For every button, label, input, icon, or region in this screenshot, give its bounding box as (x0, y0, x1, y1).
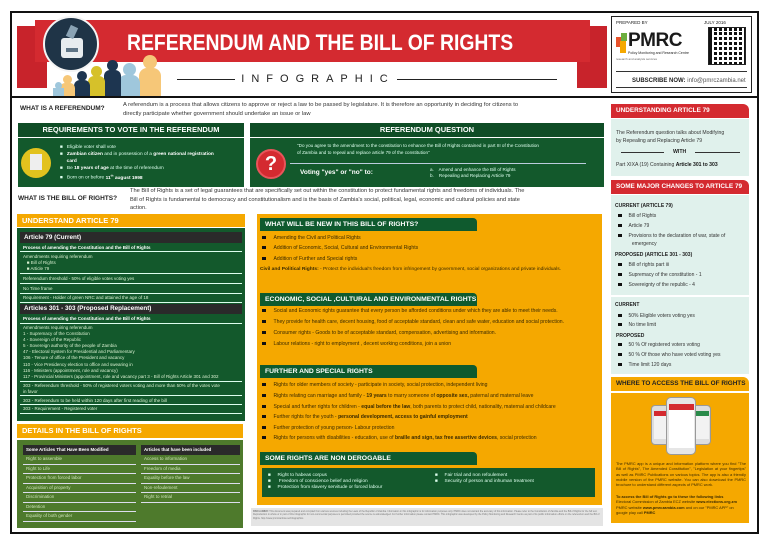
panel: understand article 79: UNDERSTAND ARTICLE 79 (22, 216, 119, 225)
panel: requirements: ■ Zambian citizen and in possession of a green national registration (60, 152, 214, 157)
heading: what will be new: WHAT WILL BE NEW IN THIS BILL OF RIGHTS? (265, 221, 418, 228)
table: modified articles: Equality of both gender (26, 513, 72, 518)
logo: research and analysis services (616, 57, 657, 61)
table: modified articles: Right to Life (26, 466, 50, 470)
panel: requirements: REQUIREMENTS TO VOTE IN THE REFERENDUM (43, 125, 219, 134)
non derogable list: ■ Protection from slavery servitude or forced labour (268, 485, 382, 490)
panel: understanding article 79: The Referendum question talks about Modifying (616, 130, 724, 136)
header divider (12, 96, 758, 98)
text: CURRENT (ARTICLE 79) (615, 203, 673, 209)
text: Article 79 (628, 223, 649, 229)
panel: major changes (611, 180, 749, 374)
non derogable list (262, 468, 595, 497)
text: 110 - Vice Presidency election to office and swearing in (23, 362, 133, 367)
text: Rights for persons with disabilities - education, use of braille and sign, tax free assertive devices, social protection (274, 435, 537, 441)
logo (616, 30, 689, 61)
non derogable list: ■ Fair trial and non refoulement (435, 473, 507, 478)
text: 116 - Ministers (appointment, role and vacancy) (23, 368, 118, 373)
text: Bill of Rights (628, 213, 656, 219)
text: Process of amending the Constitution and the Bill of Rights (23, 245, 151, 250)
text: PROPOSED (ARTICLE 301 - 303) (615, 252, 692, 258)
panel: requirements: ■ Born on or before 11th august 1998 (60, 173, 143, 181)
text: in favor (23, 389, 38, 394)
panel: details in the bill of rights (17, 424, 243, 528)
text: Addition of Economic, Social, Cultural and Environmental Rights (274, 245, 418, 251)
text: 106 - Tenure of office of the President and vacancy (23, 355, 124, 360)
icon: question mark (256, 149, 286, 179)
what is the bill of rights: The Bill of Rights is a set of legal guarantees that are specifically set out within the constitution to protect fundamental rights and freedoms of individuals. The (130, 188, 524, 194)
panel: understand article 79 (17, 214, 245, 421)
subscribe: SUBSCRIBE NOW: info@pmrczambia.net (632, 78, 746, 84)
icon: ballot box circle (43, 16, 99, 72)
icon: question mark: ? (265, 153, 277, 175)
table: modified articles: Protection from forced labor (26, 475, 82, 480)
text: 117 - Provincial Ministers (appointment, role and vacancy part 3 - Bill of Rights Article 301 and 302 (23, 374, 219, 379)
non derogable list: ■ Freedom of conscience belief and religion (268, 479, 368, 484)
table: modified articles: Right to assemble (26, 456, 62, 461)
disclaimer: DISCLAIMER: This document was prepared and compiled from various sources including the Laws of the Republic of Zambia. Information in this infographic is for information purposes only. PMRC does not warrant the accuracy of this information. Please refer to the Constitution of Zambia and the Bill of Rights for the full text. Reproduction in whole or in part of this infographic for non-commercial purposes is permitted provided the source is acknowledged. For further information please contact PMRC. This infographic was developed by the Policy Monitoring and Research Centre as part of its public information efforts on the referendum and the Bill of Rights. http://www.pmrczambia.net/infographics (253, 510, 599, 520)
heading: economic social rights (260, 293, 477, 306)
table: included articles: Freedom of media (144, 466, 181, 470)
text: 50% Eligible voters voting yes (628, 313, 695, 319)
panel: requirements (18, 123, 244, 187)
text: PROPOSED (616, 333, 644, 339)
text: 303 - Requirement - Registered voter (23, 406, 97, 411)
header banner (17, 20, 607, 88)
logo: Policy Monitoring and Research Centre (628, 51, 689, 55)
ribbon right tail (577, 26, 607, 88)
text: 4 - Sovereign of the Republic (23, 337, 81, 342)
infographic subtitle: INFOGRAPHIC (241, 73, 395, 85)
logo: PMRC (628, 30, 682, 51)
text: 47 - Electoral System for Presidential and Parliamentary (23, 349, 135, 354)
disclaimer (251, 508, 603, 526)
heading: further and special rights (260, 365, 477, 378)
table: included articles: Access to information (144, 456, 187, 461)
panel: understanding article 79 (611, 104, 749, 176)
text: Special and further rights for children - equal before the law, both parents to protect child, nationality, maternal and childcare (274, 404, 556, 410)
text: 1 - Supremacy of the Constitution (23, 331, 90, 336)
panel: referendum question: "Do you agree to the amendment to the constitution to enhance the Bill of Rights contained in part III of the Constitution (297, 143, 539, 148)
ribbon left tail (17, 26, 47, 88)
text: CURRENT (615, 302, 639, 308)
text: No time limit (628, 322, 656, 328)
text: Sovereignty of the republic - 4 (628, 282, 695, 288)
what is a referendum (20, 102, 518, 117)
text: No Time frame (23, 286, 53, 291)
what is the bill of rights: WHAT IS THE BILL OF RIGHTS? (18, 195, 117, 202)
table: modified articles (23, 445, 136, 522)
panel: referendum question: of Zambia and to repeal and replace article 79 of the constitution" (297, 150, 430, 155)
heading: what will be new (260, 218, 477, 231)
panel: referendum question: a. Amend and enhance the Bill of Rights (430, 167, 516, 172)
text: Amending the Civil and Political Rights (274, 235, 361, 241)
icon: QR code (708, 27, 746, 65)
panel: details in the bill of rights: DETAILS IN THE BILL OF RIGHTS (22, 426, 142, 435)
text: Time limit 120 days (628, 362, 671, 368)
text: Further protection of young person- Labour protection (274, 425, 394, 431)
PMRC box: JULY 2016 (704, 20, 726, 25)
panel: where to access: The PMRC app is a unique and information platform where you find "The Bill of Rights", The Amended Constitution", "Legislation at your fingertips" as well as PMRC Publications on various topics. The app is also a friendly mobile version of the PMRC website. You can also download the PMRC brochure to understand different aspects of PMRC work. (616, 461, 746, 487)
text: Article 79 (Current) (24, 234, 81, 241)
text: Labour relations - right to employment , decent working conditions, join a union (274, 341, 451, 347)
panel: referendum question: Voting "yes" or "no" to: (300, 169, 373, 176)
text: ■ Article 79 (27, 266, 49, 271)
text: Articles 301 - 303 (Proposed Replacement) (24, 305, 151, 312)
text: Addition of Further and Special rights (274, 256, 357, 262)
what is the bill of rights (18, 188, 524, 211)
text: 303 - Referendum to be held within 120 days after first reading of the bill (23, 398, 167, 403)
panel: where to access: WHERE TO ACCESS THE BILL OF RIGHTS (616, 380, 745, 387)
text: Rights for older members of society - participate in society, social protection, independent living (274, 382, 487, 388)
text: Further rights for the youth - personal development, access to gainful employment (274, 414, 468, 420)
table: included articles: Equality before the law (144, 475, 190, 480)
what is a referendum: A referendum is a process that allows citizens to approve or reject a law to be passed by legislature. It is therefore an opportunity in deciding for citizens to (123, 102, 518, 108)
table: modified articles: Some Articles That Have Been Modified (26, 447, 109, 452)
panel: new rights (orange) (257, 214, 602, 505)
text: ■ Bill of Rights (27, 260, 56, 265)
heading: further and special rights: FURTHER AND SPECIAL RIGHTS (265, 368, 373, 375)
text: Civil and Political Rights: - Protect the individual's freedom from infringement by government, social organizations and private individuals. (260, 267, 561, 272)
PMRC box: PREPARED BY (616, 20, 648, 25)
what is the bill of rights: Bill of Rights is fundamental to democracy and constitutionalism and is the basis of Zambia's social, political, legal, economic and cultural policies and state (130, 196, 520, 202)
table: included articles: Non-refoulement (144, 484, 178, 490)
panel: understanding article 79: Part XIXA (19) Containing Article 301 to 303 (616, 162, 718, 168)
text: 303 - Referendum threshold - 50% of registered voters voting and more than 50% of the votes vote (23, 383, 220, 388)
panel: requirements: ■ Be 18 years of age at the time of referendum (60, 166, 164, 171)
what is a referendum: WHAT IS A REFERENDUM? (20, 105, 105, 112)
text: They provide for health care, decent housing, food of acceptable standard, clean and safe water, education and social protection. (274, 319, 564, 325)
icon: document (21, 148, 51, 178)
panel: understanding article 79: by Repealing and Replacing Article 79 (616, 138, 702, 144)
table: modified articles: Detention (26, 504, 45, 508)
icon: phones (651, 397, 711, 455)
heading: non derogable: SOME RIGHTS ARE NON DEROGABLE (265, 455, 391, 462)
table: modified articles: Discrimination (26, 494, 54, 499)
heading: non derogable (260, 452, 477, 465)
panel: referendum question (250, 123, 604, 187)
panel: referendum question: b. Repealing and Replacing Article 79 (430, 173, 510, 178)
panel: where to access (611, 377, 749, 523)
PMRC box (611, 16, 752, 93)
text: 5 - Sovereign authority of the people of Zambia (23, 343, 117, 348)
panel: referendum question: REFERENDUM QUESTION (380, 125, 474, 134)
icon: people crowd (53, 55, 161, 96)
table: modified articles: Acquisition of property (26, 484, 71, 490)
panel: requirements: card (67, 159, 77, 164)
text: Provisions to the declaration of war, state of (628, 233, 725, 239)
text: Supremacy of the constitution - 1 (628, 272, 702, 278)
what is the bill of rights: action. (130, 205, 147, 211)
panel: requirements: ■ Eligible voter shall vote (60, 145, 116, 150)
text: Rights relating can marriage and family - 19 years to marry someone of opposite sex, paternal and maternal leave (274, 393, 533, 399)
text: Social and Economic rights guarantee that every person be afforded conditions under which they are able to meet their needs. (274, 308, 558, 314)
panel: where to access: Electoral Commission of Zambia ECZ website www.elections.org.zm PMRC website www.pmrczambia.com and on our "PMRC APP" on google play call PMRC (616, 499, 737, 515)
text: emergency (632, 241, 657, 247)
text: Bill of rights part iii (628, 262, 669, 268)
text: Process of amending the Constitution and the Bill of Rights (23, 316, 151, 321)
panel: major changes: SOME MAJOR CHANGES TO ARTICLE 79 (616, 183, 742, 190)
panel: understanding article 79: WITH (673, 149, 686, 155)
text: Amendments requiring referendum (23, 254, 93, 259)
text: Consumer rights - Goods to be of acceptable standard, compensation, advertising and information. (274, 330, 496, 336)
panel: understanding article 79: UNDERSTANDING ARTICLE 79 (616, 107, 710, 114)
what is a referendum: directly participate whether government should undertake an issue or law (123, 111, 311, 117)
heading: economic social rights: ECONOMIC, SOCIAL ,CULTURAL AND ENVIRONMENTAL RIGHTS (265, 296, 476, 303)
panel: where to access: To access the Bill of Rights go to these the following links (616, 494, 723, 499)
text: Requirement - Holder of green NRC and attained the age of 18 (23, 295, 148, 300)
text: 50 % Of registered voters voting (628, 342, 700, 348)
non derogable list: ■ Right to habeas corpus (268, 473, 327, 478)
non derogable list: ■ Security of person and inhuman treatment (435, 479, 534, 484)
table: included articles: Articles that have been included (144, 447, 211, 452)
text: 50 % Of those who have voted voting yes (628, 352, 720, 358)
text: Referendum threshold - 50% of eligible votes voting yes (23, 276, 134, 281)
text: Amendments requiring referendum (23, 325, 93, 330)
red band (35, 20, 590, 62)
title: REFERENDUM AND THE BILL OF RIGHTS (127, 30, 513, 55)
table: included articles (141, 445, 240, 503)
panel: details in the bill of rights: Right to retrial (144, 494, 172, 499)
